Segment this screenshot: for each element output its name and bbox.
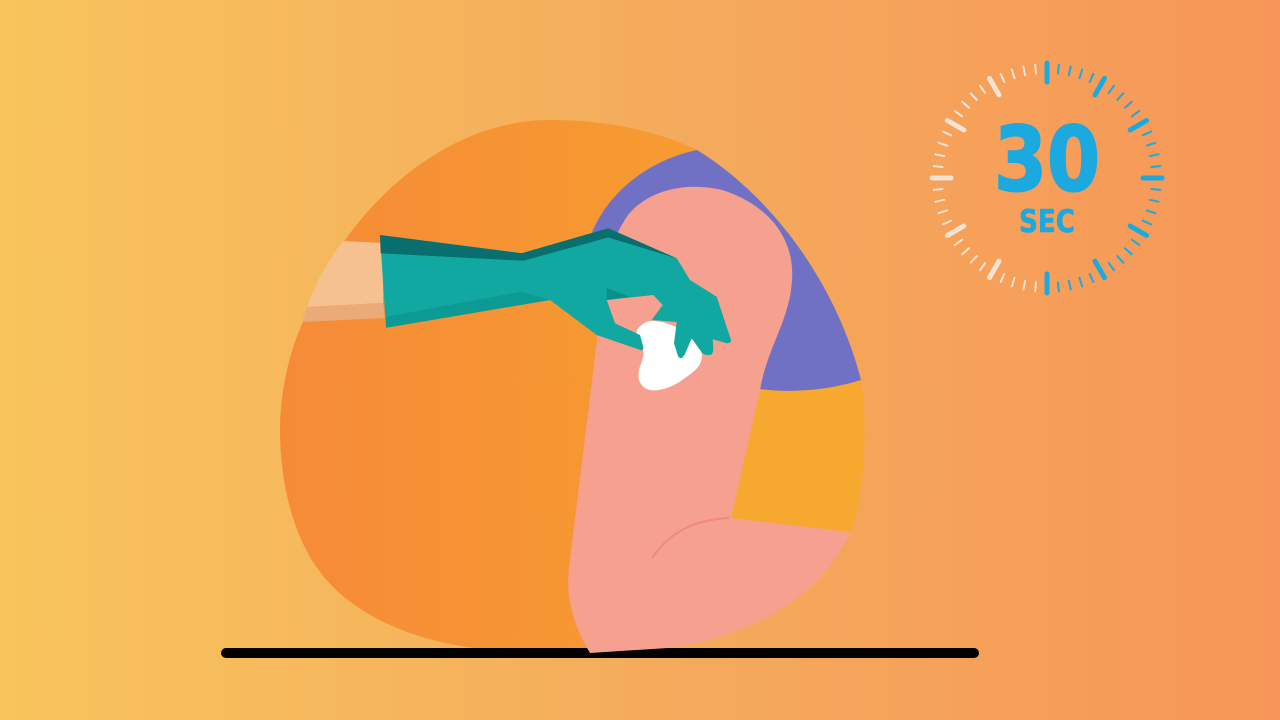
timer dial: [932, 63, 1162, 293]
timer number: 30: [994, 107, 1100, 211]
palm fold: [607, 288, 630, 300]
glove base: [380, 228, 731, 358]
white ticks: [932, 65, 1036, 291]
timer unit: SEC: [1019, 204, 1075, 240]
skin crease: [652, 518, 729, 558]
window light band: [302, 241, 385, 322]
arm: [568, 187, 850, 653]
gloved hand: [380, 228, 731, 358]
blue ticks: [1047, 63, 1162, 293]
glove top shadow: [380, 228, 677, 261]
orange circle backdrop: [280, 120, 697, 650]
glove lower shadow: [386, 292, 550, 328]
purple sleeve: [592, 150, 861, 392]
ground line: [221, 648, 979, 658]
yellow shirt: [725, 380, 865, 532]
cotton pad: [637, 321, 702, 390]
